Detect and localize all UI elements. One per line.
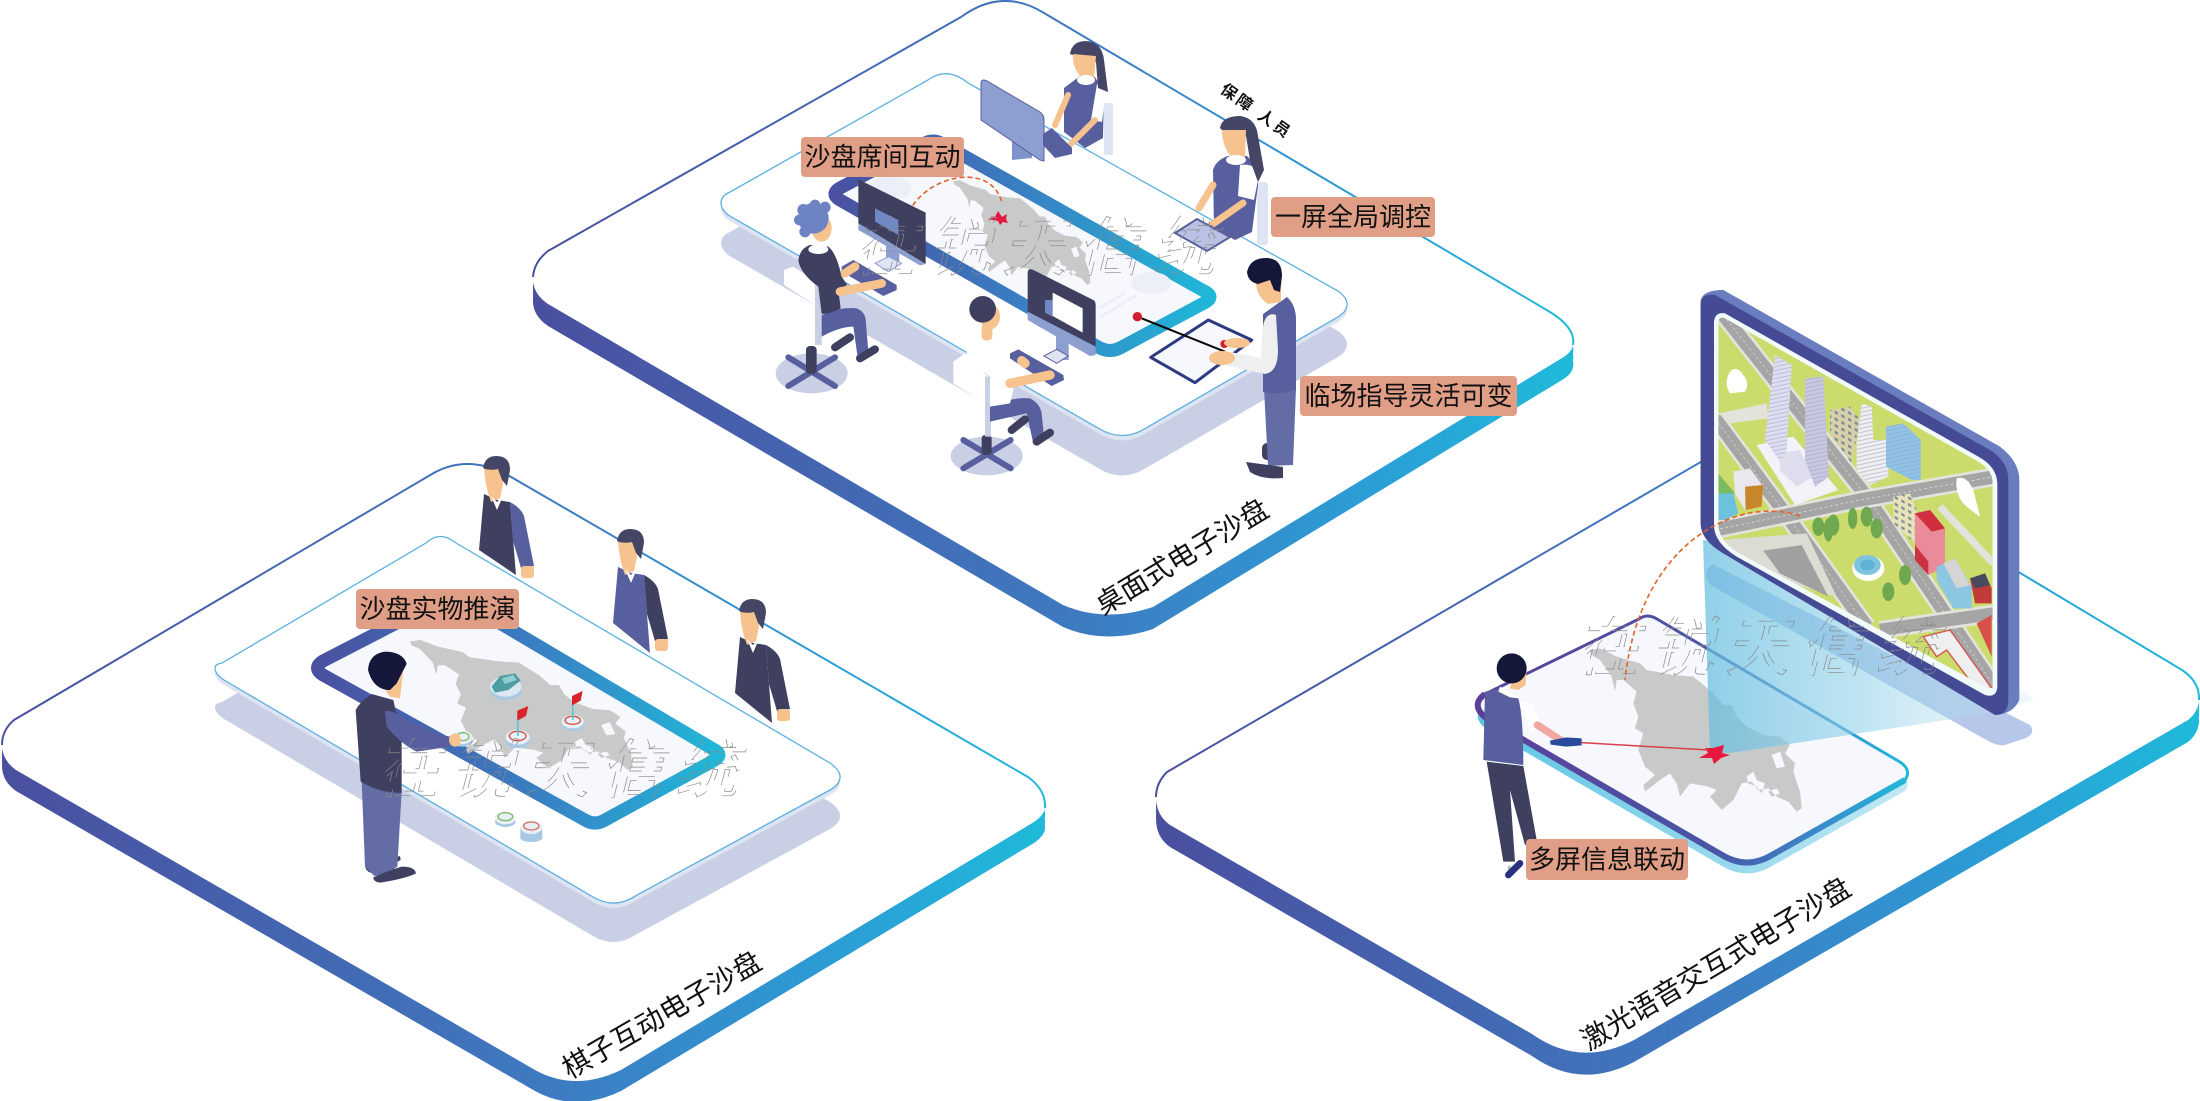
person: standing officer 2 xyxy=(613,529,668,653)
heading: desktop electronic sand table: 桌面式电子沙盘 xyxy=(1090,493,1274,621)
watermark: desktop panel: 在锐天信统 xyxy=(849,212,1241,284)
tablet sand table on laser platform xyxy=(1478,616,1908,874)
heading: laser voice interactive sand table: 激光语音交互式电子沙盘 xyxy=(1576,872,1856,1056)
icon: pointer stick with red tips xyxy=(1133,312,1228,352)
person: curly-haired operator xyxy=(776,200,897,393)
panel: desktop electronic sand table platform xyxy=(533,1,1573,637)
person: presenter moving chess token xyxy=(356,652,461,883)
arc: orange dashed interaction arc xyxy=(905,177,1002,228)
monitor: lower operator xyxy=(1028,269,1096,363)
icon: red star on desktop map xyxy=(988,211,1008,225)
icon: red flag token xyxy=(506,706,530,748)
arc: orange dashed laser arc xyxy=(1625,511,1800,680)
label: staff: 保障 人员 xyxy=(1217,79,1296,143)
map: desktop table xyxy=(953,180,1090,285)
label: physical sand table deduction: 沙盘实物推演 xyxy=(359,594,516,624)
person: seated woman operator at top with monitor xyxy=(981,41,1113,161)
icon: laser remote xyxy=(1550,737,1582,747)
person: standing officer 3 xyxy=(735,599,790,723)
icon: red flag token 2 xyxy=(562,691,584,731)
map: chess table xyxy=(410,640,633,770)
icon: token under hand xyxy=(452,731,472,747)
buildings: twin towers xyxy=(1757,355,1838,505)
watermark: chess panel: 在锐天信统 xyxy=(372,734,764,806)
panel: chess interactive sand table platform xyxy=(2,464,1045,1101)
person: laser pointer operator xyxy=(1483,653,1708,877)
buildings: right blocks xyxy=(1893,493,1992,608)
person: support staff woman with tablet xyxy=(1175,116,1268,251)
trees xyxy=(1812,507,1911,601)
monitor: top operator xyxy=(981,80,1044,161)
icon: car token xyxy=(490,673,521,700)
illustration: isometric city xyxy=(1713,313,1997,697)
icon: handheld tablet xyxy=(1175,219,1230,251)
label: multi-screen linkage: 多屏信息联动 xyxy=(1529,844,1685,874)
large wall screen with city xyxy=(1701,290,2019,715)
buildings: left blocks xyxy=(1718,468,1763,520)
person: standing officer 1 xyxy=(479,456,534,578)
icon: token stacks on table xyxy=(495,812,542,842)
icon: red star target xyxy=(1699,745,1730,764)
laser beam xyxy=(1582,743,1708,750)
label: tabletop seat interaction: 沙盘席间互动 xyxy=(804,142,961,172)
icon: paper tablet on table xyxy=(1151,320,1252,383)
watermark: laser panel: 在锐天信统 xyxy=(1572,612,1964,684)
group: chess tokens and presenter in zoomed coordinates xyxy=(356,652,584,883)
building: lower right xyxy=(1923,615,1992,688)
heading: chess interactive sand table: 棋子互动电子沙盘 xyxy=(557,946,767,1084)
projection beam and shadow from screen xyxy=(1703,540,2035,753)
icon: fountain xyxy=(1852,555,1884,581)
map: laser table xyxy=(1590,648,1802,812)
panel: laser voice interactive sand table platform xyxy=(1156,435,2199,1075)
desktop table with touch screen xyxy=(721,74,1347,475)
monitor: left operator xyxy=(858,179,926,272)
person: standing presenter with pointer xyxy=(1209,258,1296,478)
label: one screen global control: 一屏全局调控 xyxy=(1275,202,1431,232)
person: short-haired operator in white shirt xyxy=(951,296,1064,475)
chess table with touch screen xyxy=(215,536,840,942)
label: on-site flexible guidance: 临场指导灵活可变 xyxy=(1304,381,1513,411)
buildings: upper blocks xyxy=(1830,403,1921,485)
group: seated operators in zoomed coordinates xyxy=(776,179,1252,475)
